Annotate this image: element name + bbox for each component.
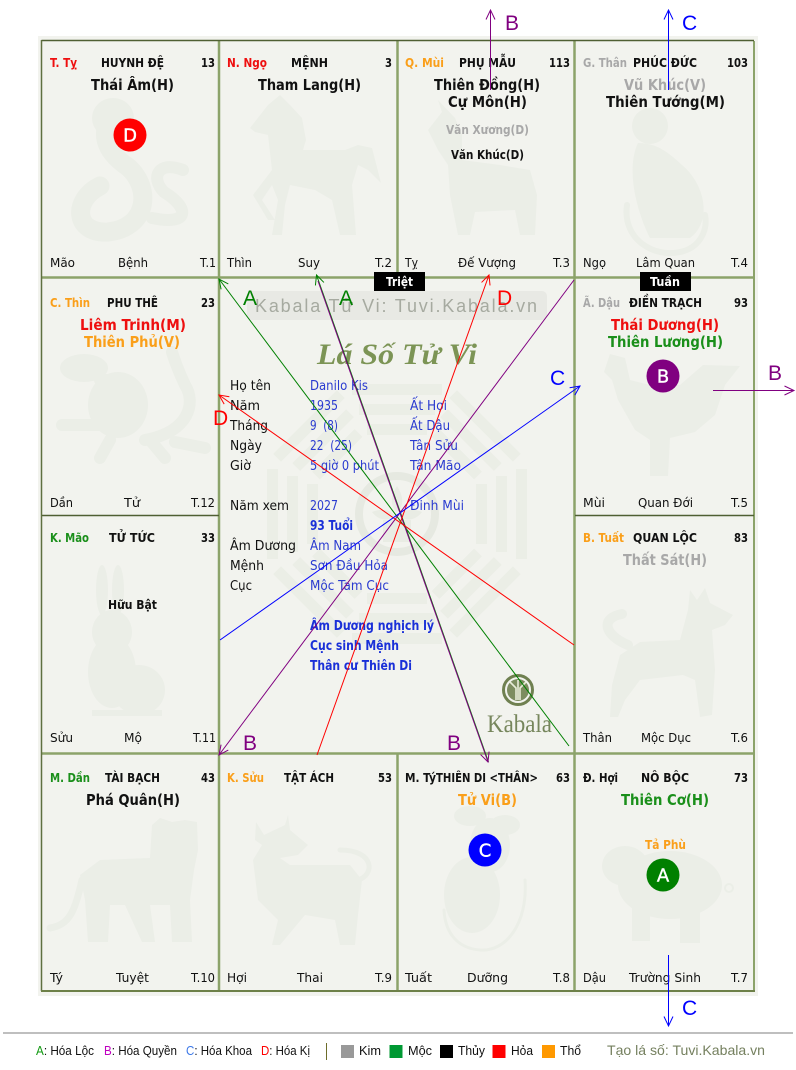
main star: Thiên Cơ(H) <box>621 791 709 809</box>
palace header: C. Thìn <box>50 295 90 310</box>
palace header: PHÚC ĐỨC <box>633 55 697 70</box>
arrow: B purple to Thiên Di <box>318 281 488 762</box>
palace footer: Quan Đới <box>638 495 693 510</box>
arrow: B purple to Mộ corner <box>219 280 574 755</box>
info row: viewing year <box>230 498 464 514</box>
palace header: HUYNH ĐỆ <box>101 55 164 70</box>
arrow: D red to Đế Vượng: D <box>497 287 512 310</box>
summary notes <box>310 617 434 674</box>
info row: element: Mộc Tam Cục <box>310 578 389 594</box>
badge: A: A <box>657 866 670 886</box>
arrow: D red to Đế Vượng <box>317 275 512 755</box>
minor stars: Văn Khúc(D) <box>451 147 524 162</box>
palace footer <box>50 495 215 510</box>
panel: K. Mão, Tử Tức <box>50 529 216 745</box>
palace footer: Dần <box>50 495 73 510</box>
legend: five elements: Thổ <box>560 1043 581 1058</box>
legend: five elements: Kim <box>359 1043 381 1058</box>
palace header <box>583 55 748 70</box>
palace header: 113 <box>549 55 570 70</box>
icon: goat <box>428 100 537 235</box>
palace footer: T.9 <box>374 970 392 985</box>
main star: Thất Sát(H) <box>623 551 707 569</box>
minor star: Tả Phù <box>645 837 686 852</box>
panel: Ã. Dậu, Điền Trạch <box>583 293 748 510</box>
info row: month: Ất Dậu <box>410 415 450 434</box>
arrow: A green to Thìn corner <box>219 279 569 746</box>
main stars: Liêm Trinh(M) <box>80 316 186 334</box>
icon: horse <box>250 95 381 235</box>
palace header <box>50 770 215 785</box>
palace header: M. Dần <box>50 770 90 785</box>
arrow: C blue to Điền Trạch: C <box>550 367 565 390</box>
main stars <box>606 76 725 111</box>
palace header: ĐIỀN TRẠCH <box>629 293 702 310</box>
site credit: Tạo lá số: Tuvi.Kabala.vn <box>607 1042 765 1058</box>
legend: star transformations: B: Hóa Quyền <box>104 1043 177 1058</box>
legend: five elements: Thủy <box>458 1043 485 1058</box>
palace footer: Bệnh <box>118 255 148 270</box>
info row: year: 1935 <box>310 398 338 414</box>
palace footer: Mộ <box>124 730 142 745</box>
palace footer: T.3 <box>552 255 570 270</box>
palace header: 13 <box>201 55 215 70</box>
info row: yin yang <box>230 536 361 554</box>
summary notes: Âm Dương nghịch lý <box>310 617 434 634</box>
arrow: C blue off chart top: C <box>682 12 697 35</box>
palace header <box>405 54 570 70</box>
palace header <box>50 55 215 70</box>
panel: B. Tuất, Quan Lộc <box>582 530 748 745</box>
palace footer <box>583 495 748 510</box>
panel: M. Dần, Tài Bạch <box>49 770 215 985</box>
panel: T. Tỵ, Huynh Đệ <box>50 55 216 270</box>
arrow: C blue off chart top <box>668 10 697 90</box>
icon: rooster <box>604 354 740 476</box>
info row: day: 22 (25) <box>310 438 352 454</box>
palace footer: Mộc Dục <box>641 730 691 745</box>
palace header: MỆNH <box>291 55 328 70</box>
palace header: B. Tuất <box>583 530 624 545</box>
palace footer: T.10 <box>190 970 215 985</box>
summary notes: Thân cư Thiên Di <box>310 658 412 674</box>
arrow: D red to Phu Thê: D <box>213 407 228 430</box>
main stars: Thiên Phủ(V) <box>84 333 180 351</box>
marker: Triệt: Triệt <box>386 274 413 289</box>
arrow: B purple off chart top: B <box>505 12 519 35</box>
palace header: 23 <box>201 295 215 310</box>
palace footer: Lâm Quan <box>636 255 695 270</box>
badge: D <box>114 118 146 152</box>
palace footer: Hợi <box>227 970 247 985</box>
palace footer <box>583 970 748 985</box>
palace header: Đ. Hợi <box>583 770 618 785</box>
info row: viewing year: Đinh Mùi <box>410 498 464 514</box>
palace header: PHỤ MẪU <box>459 54 516 70</box>
palace footer: Suy <box>298 255 321 270</box>
arrow: A green to Suy <box>316 275 488 762</box>
icon: dog <box>608 588 733 717</box>
palace footer <box>50 730 216 745</box>
arrow: B purple off chart top <box>490 10 519 90</box>
palace footer: T.2 <box>374 255 392 270</box>
info row: yin yang: Âm Nam <box>310 536 361 554</box>
arrow: C blue off chart bottom: C <box>682 997 697 1020</box>
main star: Phá Quân(H) <box>86 791 180 809</box>
palace footer <box>49 970 215 985</box>
info row: year <box>230 395 447 414</box>
main stars <box>608 316 723 351</box>
palace footer: Trường Sinh <box>628 970 701 985</box>
palace header <box>227 770 392 785</box>
minor star: Hữu Bật <box>108 597 157 612</box>
palace footer: T.12 <box>190 495 215 510</box>
icon: snake <box>81 98 183 232</box>
arrow: B purple to Thiên Di: B <box>447 732 461 755</box>
palace header: TỬ TỨC <box>109 529 155 545</box>
palace header: 63 <box>556 770 570 785</box>
icon: rat <box>444 806 525 950</box>
palace footer: T.11 <box>192 730 216 745</box>
palace header: 3 <box>385 55 392 70</box>
palace header: TÀI BẠCH <box>105 770 160 785</box>
panel: M. Tý, Thiên Di <box>404 770 570 985</box>
palace footer: Thai <box>296 970 323 985</box>
main star: Tham Lang(H) <box>258 76 361 94</box>
info row: destiny: Sơn Đầu Hỏa <box>310 558 388 574</box>
palace footer <box>582 730 748 745</box>
info row: element <box>230 578 389 594</box>
website watermark banner: Kabala Tử Vi: Tuvi.Kabala.vn <box>255 296 537 316</box>
palace header: QUAN LỘC <box>633 530 697 545</box>
palace footer: Tỵ <box>404 255 419 270</box>
center watermark: bagua emblem <box>267 384 527 644</box>
badge: B <box>646 360 680 392</box>
main stars: Thiên Tướng(M) <box>606 93 725 111</box>
info row: hour: Giờ <box>230 458 252 474</box>
info row: hour: 5 giờ 0 phút <box>310 458 379 474</box>
marker: Tuần: Tuần <box>650 274 680 289</box>
palace header: K. Mão <box>50 530 89 545</box>
palace footer: Thân <box>582 730 612 745</box>
palace footer: T.5 <box>730 495 748 510</box>
palace header: T. Tỵ <box>50 55 77 70</box>
palace footer: T.8 <box>552 970 570 985</box>
logo: Kabala: Kabala <box>487 711 552 738</box>
palace footer: T.6 <box>730 730 748 745</box>
main stars: Thiên Đồng(H) <box>434 75 540 94</box>
panel: G. Thân, Phúc Đức <box>583 55 748 270</box>
legend: star transformations: A: Hóa Lộc <box>36 1043 94 1058</box>
panel: C. Thìn, Phu Thê <box>50 295 215 510</box>
main stars <box>80 316 186 351</box>
panel: Đ. Hợi, Nô Bộc <box>583 770 748 985</box>
palace footer <box>226 255 392 270</box>
minor stars <box>446 122 529 162</box>
palace header: 43 <box>201 770 215 785</box>
palace header: PHU THÊ <box>107 295 158 310</box>
arrow: B purple off chart right: B <box>768 362 782 385</box>
palace footer: Tử <box>123 495 141 510</box>
website watermark banner <box>247 291 547 320</box>
palace footer <box>404 255 570 270</box>
info row: name <box>230 378 368 394</box>
palace footer: Đế Vượng <box>458 255 516 270</box>
palace footer: T.1 <box>199 255 216 270</box>
icon: monkey <box>626 108 706 253</box>
palace header: 53 <box>378 770 392 785</box>
palace header <box>583 770 748 785</box>
palace footer: T.7 <box>730 970 748 985</box>
palace footer: Tý <box>49 970 64 985</box>
icon: rabbit <box>88 565 165 716</box>
panel: Q. Mùi, Phụ Mẫu <box>404 54 570 270</box>
info row: viewing year: 2027 <box>310 498 338 514</box>
icon: ox <box>253 815 369 945</box>
palace header: M. Tý <box>405 770 436 785</box>
legend: star transformations <box>36 1043 310 1058</box>
palace header: N. Ngọ <box>227 55 267 70</box>
arrow: C blue to Điền Trạch <box>220 367 580 640</box>
palace header: Ã. Dậu <box>583 295 620 310</box>
palace header: G. Thân <box>583 55 627 70</box>
main stars: Vũ Khúc(V) <box>624 76 706 94</box>
icon: pig <box>602 846 733 943</box>
palace footer: Dưỡng <box>467 970 508 985</box>
info row: month: Tháng <box>229 418 268 434</box>
info row: hour: Tân Mão <box>409 458 461 474</box>
panel: N. Ngọ, Mệnh <box>226 55 392 270</box>
palace header: THIÊN DI <THÂN> <box>436 770 538 785</box>
arrow: A green to Thìn corner: A <box>243 287 257 310</box>
palace footer: Ngọ <box>583 255 606 270</box>
palace header <box>583 530 748 545</box>
palace footer: Tuất <box>404 970 432 985</box>
info row: name: Danilo Kis <box>310 378 368 394</box>
palace header: 103 <box>727 55 748 70</box>
icon: tiger <box>50 818 198 942</box>
main stars: Thái Dương(H) <box>611 316 719 334</box>
arrow: B purple off chart right <box>713 362 794 390</box>
info row: year: Năm <box>230 398 260 414</box>
marker: Tuần <box>640 272 691 291</box>
icon: dragon <box>60 352 205 458</box>
palace header: NÔ BỘC <box>641 770 689 785</box>
legend: five elements <box>341 1043 581 1058</box>
main stars <box>434 75 540 111</box>
summary notes: Cục sinh Mệnh <box>310 638 399 654</box>
badge: C: C <box>479 840 491 862</box>
palace footer: Tuyệt <box>115 970 149 985</box>
arrow: A green to Suy: A <box>339 287 353 310</box>
info row: destiny: Mệnh <box>230 558 264 574</box>
palace footer: Mão <box>50 255 75 270</box>
minor stars: Văn Xương(D) <box>446 122 529 137</box>
birth info table <box>229 378 464 674</box>
palace footer: Mùi <box>583 495 605 510</box>
info row: year: Ất Hợi <box>410 395 447 414</box>
main star: Thái Âm(H) <box>91 75 174 94</box>
info row: day <box>230 438 458 454</box>
badge: A <box>646 858 680 892</box>
panel: K. Sửu, Tật Ách <box>227 770 392 985</box>
info row: yin yang: Âm Dương <box>230 536 296 554</box>
palace header: TẬT ÁCH <box>284 770 334 785</box>
palace header: Q. Mùi <box>405 55 444 70</box>
palace header <box>583 293 748 310</box>
palace header <box>50 529 215 545</box>
palace footer <box>50 255 216 270</box>
info row: hour <box>230 458 461 474</box>
arrow: C blue off chart bottom <box>668 955 697 1026</box>
info row: destiny <box>230 558 388 574</box>
palace footer: Thìn <box>226 255 252 270</box>
info row: day: Ngày <box>230 438 262 454</box>
info row: name: Họ tên <box>230 378 271 394</box>
info row: month <box>229 415 450 434</box>
palace footer: Sửu <box>50 730 73 745</box>
palace header: 33 <box>201 530 215 545</box>
badge: D: D <box>123 126 137 146</box>
arrow: D red to Phu Thê <box>213 395 574 645</box>
palace footer: T.4 <box>730 255 748 270</box>
main stars: Thiên Lương(H) <box>608 333 723 351</box>
palace header: 83 <box>734 530 748 545</box>
info row: element: Cục <box>230 578 252 594</box>
info row: day: Tân Sửu <box>409 438 458 454</box>
badge: B: B <box>657 366 669 388</box>
legend: five elements: Mộc <box>408 1043 432 1058</box>
palace footer <box>404 970 570 985</box>
title: Lá Số Tử Vi: Lá Số Tử Vi <box>316 338 478 371</box>
palace footer: Dậu <box>583 970 606 985</box>
palace footer <box>583 255 748 270</box>
badge: C <box>468 834 502 866</box>
legend: five elements: Hỏa <box>511 1043 534 1058</box>
palace header: 93 <box>734 295 748 310</box>
arrow: B purple to Mộ corner: B <box>243 732 257 755</box>
info row: age: 93 Tuổi <box>310 517 353 534</box>
palace footer <box>227 970 392 985</box>
info row: viewing year: Năm xem <box>230 498 289 514</box>
palace header <box>50 295 215 310</box>
info row: month: 9 (8) <box>310 418 338 434</box>
palace header <box>227 55 392 70</box>
palace header: 73 <box>734 770 748 785</box>
main star: Tử Vi(B) <box>458 791 517 809</box>
main stars: Cự Môn(H) <box>448 93 527 111</box>
legend: star transformations: D: Hóa Kị <box>261 1043 310 1058</box>
legend: star transformations: C: Hóa Khoa <box>186 1043 253 1058</box>
palace header: K. Sửu <box>227 770 264 785</box>
logo: Kabala <box>487 676 552 738</box>
marker: Triệt <box>374 272 425 291</box>
